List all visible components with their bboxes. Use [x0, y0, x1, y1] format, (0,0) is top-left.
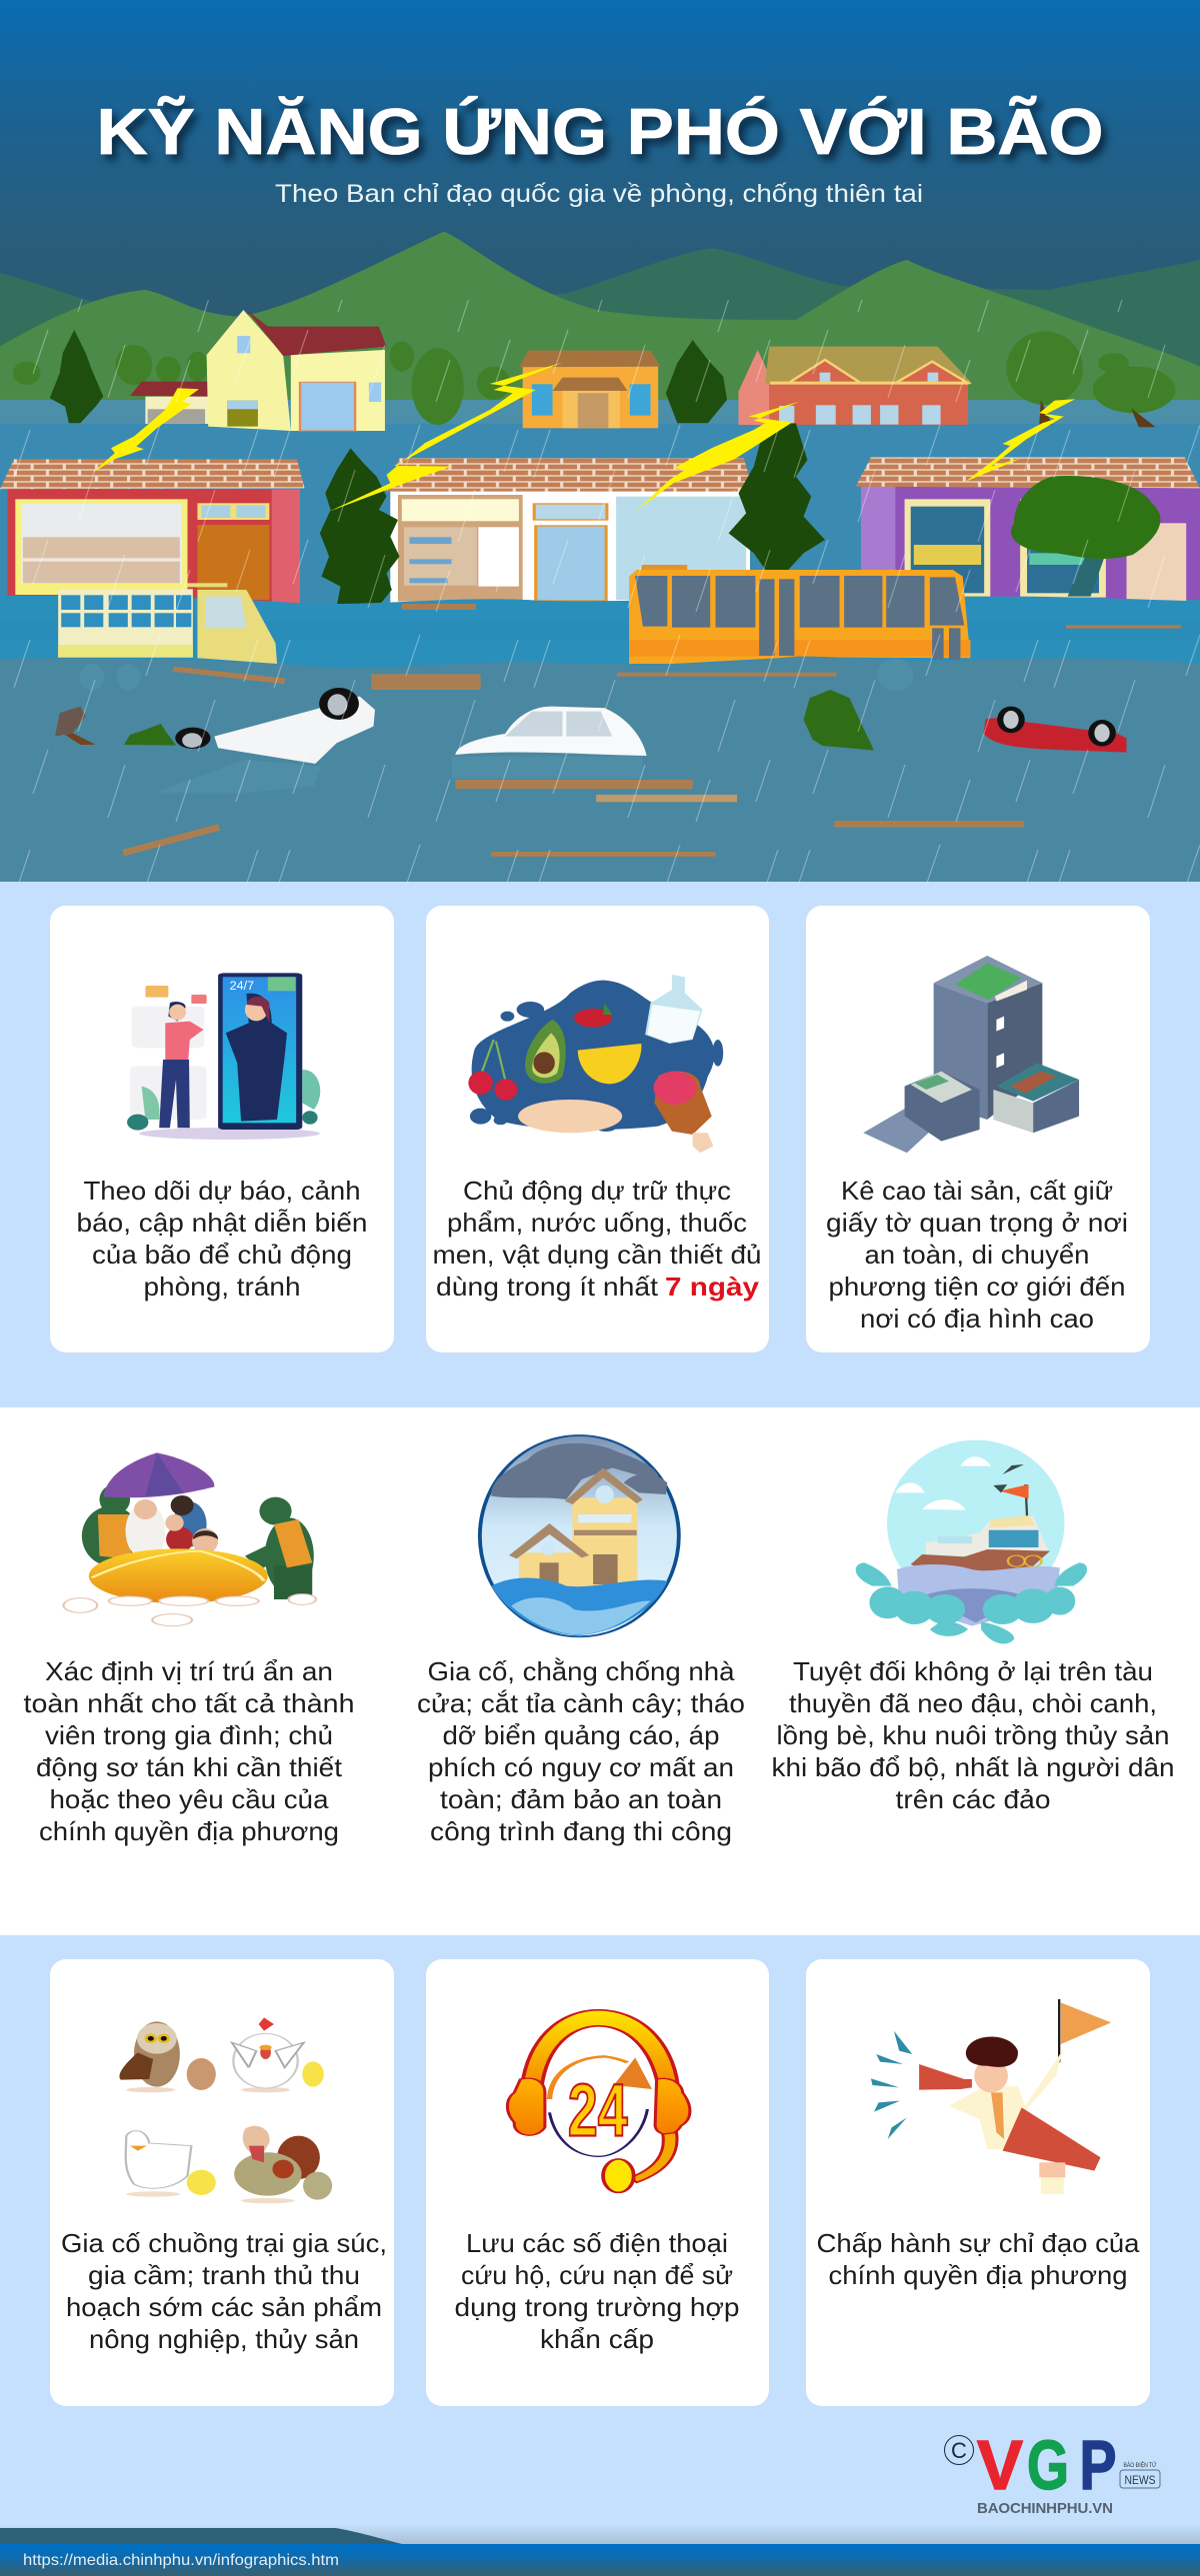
- text: Kê cao tài sản, cất giữ: [841, 1176, 1113, 1206]
- mid water: [0, 596, 1200, 673]
- icon: phone support: 24/7: [230, 980, 254, 993]
- round tree front purple shop: [1011, 476, 1160, 597]
- text: trên các đảo: [896, 1784, 1050, 1814]
- main green mountains: [0, 232, 1200, 433]
- text: nơi có địa hình cao: [860, 1303, 1094, 1333]
- website: BAOCHINHPHU.VN: [977, 2500, 1113, 2517]
- yellow truck: [58, 583, 277, 664]
- orange house: [519, 351, 660, 428]
- text: gia cầm; tranh thủ thu: [88, 2260, 360, 2290]
- text: báo, cập nhật diễn biến: [76, 1208, 368, 1238]
- section row 2 white band: [0, 1407, 1200, 1935]
- card 3: secure documents: [806, 906, 1150, 1352]
- rain overlay: [0, 300, 1200, 882]
- text: giấy tờ quan trọng ở nơi: [826, 1208, 1128, 1238]
- text: [454, 2228, 740, 2354]
- big pine right: [729, 423, 825, 570]
- text: Xác định vị trí trú ẩn an: [45, 1656, 333, 1686]
- footer tab: [0, 2528, 402, 2544]
- text: khẩn cấp: [540, 2324, 654, 2354]
- card 8: emergency numbers: [426, 1959, 769, 2406]
- white car: [455, 707, 647, 756]
- lightning bolts: [92, 363, 1075, 512]
- text: của bão để chủ động: [92, 1240, 352, 1270]
- text: viên trong gia đình; chủ: [45, 1720, 333, 1750]
- card 2: food storage: [426, 906, 769, 1352]
- news label: NEWS: [1124, 2473, 1156, 2487]
- icon: man with megaphone: [871, 1999, 1111, 2194]
- text: hoặc theo yêu cầu của: [50, 1784, 329, 1814]
- text: dùng trong ít nhất: [436, 1272, 659, 1301]
- text: [432, 1176, 762, 1301]
- overturned red car: [983, 707, 1127, 753]
- text: lồng bè, khu nuôi trồng thủy sản: [776, 1720, 1170, 1750]
- text: nông nghiệp, thủy sản: [89, 2324, 359, 2354]
- drifting green tree: [804, 690, 874, 751]
- news box: [1120, 2470, 1160, 2488]
- front water: [0, 657, 1200, 882]
- text: chính quyền địa phương: [39, 1816, 339, 1846]
- VGP logo: [944, 2426, 1160, 2517]
- text: dỡ biển quảng cáo, áp: [442, 1720, 720, 1750]
- broken branch and bush: [55, 707, 176, 746]
- text: [826, 1176, 1128, 1333]
- red house: [739, 347, 972, 425]
- text: toàn; đảm bảo an toàn: [440, 1784, 722, 1814]
- subtitle: Theo Ban chỉ đạo quốc gia về phòng, chống thiên tai: [275, 180, 923, 208]
- background round trees: [13, 332, 1176, 425]
- orange bus: [629, 565, 970, 664]
- text: cứu hộ, cứu nạn để sử: [461, 2260, 733, 2290]
- text: hoạch sớm các sản phẩm: [66, 2292, 382, 2322]
- small label: BÁO ĐIỆN TỬ: [1124, 2461, 1156, 2469]
- card 7: livestock: [50, 1959, 394, 2406]
- plank behind: [402, 604, 1181, 629]
- text: thuyền đã neo đậu, chòi canh,: [789, 1688, 1157, 1718]
- letter G: G: [1027, 2426, 1069, 2504]
- flood scene upper: mountains and houses: [0, 232, 1200, 461]
- far mountains: [0, 248, 1200, 433]
- text: Gia cố chuồng trại gia súc,: [61, 2228, 387, 2258]
- text: Gia cố, chằng chống nhà: [428, 1656, 735, 1686]
- text: cửa; cắt tỉa cành cây; tháo: [417, 1688, 745, 1718]
- red bakery shop: [0, 459, 305, 603]
- water behind shops: [0, 440, 1200, 673]
- card 9: follow authorities: [806, 1959, 1150, 2406]
- tree trunks: [1039, 400, 1156, 427]
- white shop: [386, 458, 754, 605]
- overturned white car: [175, 688, 375, 764]
- icon: flooded house circle: [480, 1435, 679, 1636]
- item 4: shelter: [24, 1452, 354, 1846]
- sky background: [0, 0, 1200, 882]
- flood scene lower: shops, water, vehicles: [0, 423, 1200, 882]
- text: an toàn, di chuyển: [864, 1240, 1090, 1270]
- text: dụng trong trường hợp: [454, 2292, 740, 2322]
- pines back: [50, 330, 103, 423]
- text: Lưu các số điện thoại: [466, 2228, 728, 2258]
- debris planks: [122, 667, 1024, 857]
- copyright letter: C: [951, 2438, 967, 2463]
- footer: [0, 2524, 1200, 2576]
- text: Chủ động dự trữ thực: [463, 1176, 731, 1206]
- submerged reflections: [80, 658, 914, 793]
- text: khi bão đổ bộ, nhất là người dân: [772, 1752, 1174, 1782]
- icon: filing cabinet: [863, 956, 1079, 1153]
- title: KỸ NĂNG ỨNG PHÓ VỚI BÃO: [96, 95, 1104, 168]
- text: phòng, tránh: [144, 1272, 300, 1301]
- card 1: follow forecast: [50, 906, 394, 1352]
- text: men, vật dụng cần thiết đủ: [432, 1240, 762, 1270]
- item 6: do not stay on boats: [772, 1440, 1174, 1814]
- text: công trình đang thi công: [430, 1816, 732, 1846]
- text: toàn nhất cho tất cả thành: [24, 1688, 354, 1718]
- text: [417, 1656, 745, 1846]
- text: phẩm, nước uống, thuốc: [447, 1208, 747, 1238]
- icon: food: [468, 975, 723, 1153]
- text: 7 ngày: [665, 1272, 760, 1301]
- text: chính quyền địa phương: [828, 2260, 1128, 2290]
- text: [76, 1176, 368, 1301]
- footer bar: [0, 2544, 1200, 2576]
- back water: [0, 400, 1200, 460]
- footer url: https://media.chinhphu.vn/infographics.htm: [23, 2552, 339, 2569]
- icon: boat on waves: [856, 1440, 1087, 1643]
- icon: 24h headset: [507, 2010, 690, 2192]
- text: Theo dõi dự báo, cảnh: [84, 1176, 360, 1206]
- icon: phone support: [127, 973, 320, 1140]
- purple shop: [856, 457, 1200, 602]
- text: [772, 1656, 1174, 1814]
- icon: 24h headset: 24: [568, 2068, 628, 2151]
- letter V: V: [977, 2426, 1023, 2504]
- text: Chấp hành sự chỉ đạo của: [816, 2228, 1140, 2258]
- letter P: P: [1080, 2426, 1116, 2504]
- copyright mark: [944, 2435, 974, 2465]
- big pine left: [320, 448, 399, 606]
- icon: farm birds: [119, 2017, 332, 2203]
- item 5: reinforce house: [417, 1435, 745, 1846]
- text: phương tiện cơ giới đến: [828, 1272, 1126, 1301]
- icon: rescue raft: [64, 1452, 316, 1626]
- text: [816, 2228, 1140, 2290]
- text: phích có nguy cơ mất an: [428, 1752, 734, 1782]
- text: [24, 1656, 354, 1846]
- text: động sơ tán khi cần thiết: [36, 1752, 343, 1782]
- yellow house: [130, 310, 386, 431]
- text: Tuyệt đối không ở lại trên tàu: [793, 1656, 1153, 1686]
- text: [61, 2228, 387, 2354]
